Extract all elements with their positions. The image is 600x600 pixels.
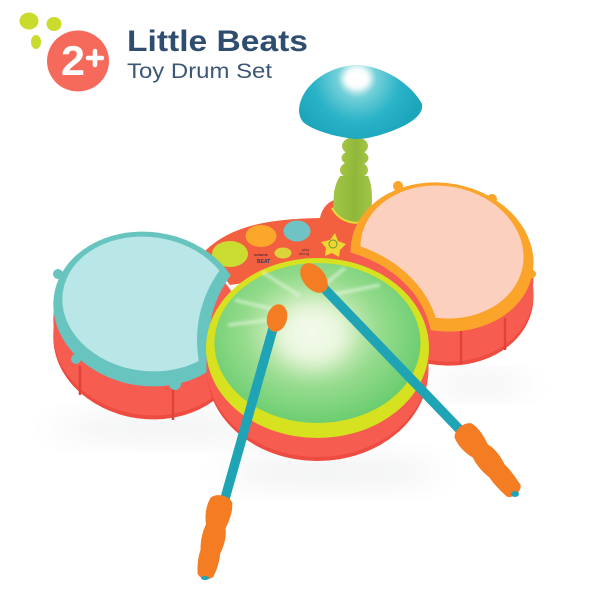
cymbal stand <box>299 65 422 223</box>
bead tip <box>295 258 333 298</box>
logo: age badge <box>20 12 109 92</box>
cymbal glow <box>344 70 370 88</box>
end cap <box>511 491 519 497</box>
rim lugs <box>53 269 181 390</box>
red shell <box>43 235 253 431</box>
grip <box>192 493 235 582</box>
panel label: beat: BEAT <box>257 259 270 265</box>
pink face <box>360 186 524 318</box>
shaft <box>320 284 462 432</box>
grip <box>450 419 526 502</box>
panel base <box>204 199 375 285</box>
orange rim <box>350 182 534 332</box>
red shell <box>339 183 545 380</box>
red shell <box>206 264 428 461</box>
centre glow <box>277 305 349 365</box>
subtitle: Toy Drum Set <box>127 59 272 83</box>
bead tip <box>264 302 290 334</box>
panel label: volume: volume <box>254 252 269 257</box>
control panel <box>204 199 375 285</box>
drumstick: left <box>192 302 290 582</box>
floor shadow <box>50 375 530 486</box>
drum: green center <box>206 258 429 461</box>
cymbal <box>299 65 422 139</box>
yellow rim <box>206 258 429 438</box>
green face <box>214 263 420 423</box>
title: Little Beats <box>127 25 308 58</box>
button: yellow <box>212 241 248 267</box>
teal rim <box>53 232 231 386</box>
button: orange <box>246 225 276 247</box>
end cap <box>201 576 209 580</box>
panel label: play: play <box>302 247 309 252</box>
plus sign <box>88 51 102 65</box>
drumstick: right <box>295 258 526 502</box>
icon: lime dots <box>20 12 62 49</box>
shaft <box>224 325 274 502</box>
panel label: along: along <box>299 251 309 256</box>
blue face <box>62 236 220 372</box>
age text: 2 <box>61 37 85 84</box>
icon: star power button <box>321 233 346 257</box>
drum: blue left <box>53 232 232 420</box>
age circle <box>47 30 109 92</box>
button: teal <box>284 220 310 242</box>
stem collar <box>332 208 364 223</box>
button: small <box>274 248 292 258</box>
rim lugs <box>393 181 536 278</box>
light rays <box>228 268 380 325</box>
drum: pink right <box>350 181 536 366</box>
stem <box>333 137 372 222</box>
